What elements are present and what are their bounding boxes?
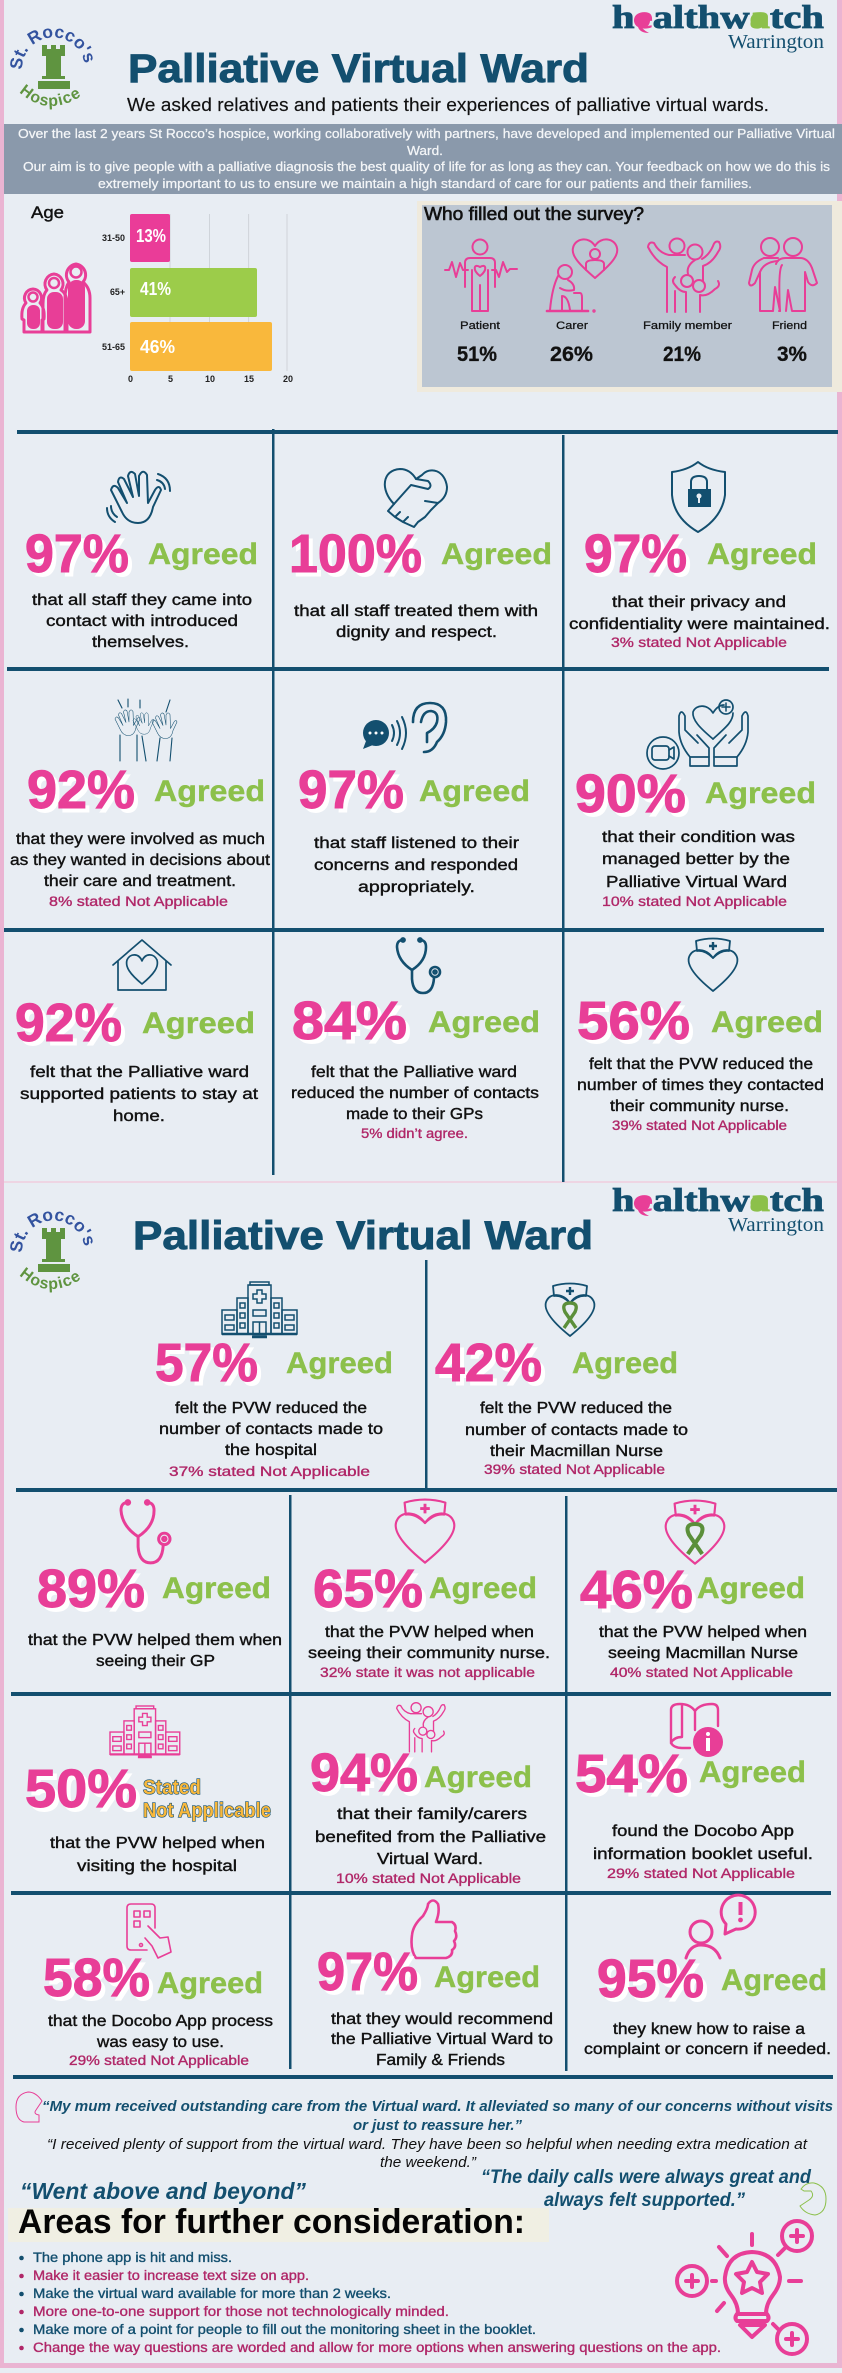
icon: green quote mark xyxy=(800,2183,826,2215)
axis labels: 0 xyxy=(128,374,133,384)
description: made to their GPs xyxy=(346,1106,483,1123)
panel: dignity and respect xyxy=(289,469,552,641)
icon: family of three xyxy=(22,264,90,332)
description: was easy to use. xyxy=(96,2034,224,2051)
logo: St Rocco's Hospice, page 2 xyxy=(6,1204,100,1293)
agreed: Agreed xyxy=(697,1572,805,1605)
stat: 92% xyxy=(15,993,122,1053)
description xyxy=(593,1823,813,1863)
icon: stethoscope xyxy=(397,938,440,993)
description xyxy=(294,603,538,641)
icon: hospital pink xyxy=(110,1706,180,1757)
description: that the PVW helped when xyxy=(325,1624,534,1641)
description: reduced the number of contacts xyxy=(291,1085,539,1102)
icon: tablet with pointer xyxy=(127,1904,171,1958)
list: considerations: Make more of a point for people to fill out the monitoring sheet in the booklet. xyxy=(33,2322,536,2337)
description: that their privacy and xyxy=(612,594,786,611)
not applicable note: 40% stated Not Applicable xyxy=(610,1665,793,1680)
icon: friend xyxy=(749,238,817,311)
not applicable note: 29% stated Not Applicable xyxy=(69,2053,249,2068)
bar: 65+: 65+ xyxy=(110,287,125,297)
intro band: Over the last 2 years St Rocco’s hospice, working collaboratively with partners, have developed and implemented our Palliative Virtual xyxy=(18,126,835,141)
labels: Carer xyxy=(556,320,588,332)
panel: Macmillan nurse contacts xyxy=(435,1284,688,1477)
heading: areas for further consideration: Areas for further consideration: xyxy=(18,2203,525,2241)
agreed: Agreed xyxy=(142,1007,255,1040)
icon: raised hands xyxy=(115,699,177,761)
stat: 57% xyxy=(155,1333,258,1393)
intro band: extremely important to us to ensure we maintain a high standard of care for our patients and their families. xyxy=(98,176,752,191)
panel: staff introduced themselves xyxy=(25,472,258,651)
grid lines, section 2 xyxy=(11,1260,837,2079)
page frame bottom xyxy=(0,2363,842,2368)
panel: raise a complaint xyxy=(584,1895,831,2058)
panel: community nurse contacts xyxy=(577,938,824,1133)
panel: recommend xyxy=(317,1900,553,2069)
panel: condition managed better xyxy=(575,700,816,909)
not applicable note: 39% stated Not Applicable xyxy=(484,1462,665,1477)
title: Palliative Virtual Ward xyxy=(128,47,589,91)
list: considerations: More one-to-one support for those not technologically minded. xyxy=(33,2304,449,2319)
description xyxy=(159,1400,383,1459)
axis labels xyxy=(128,374,293,384)
description: they knew how to raise a xyxy=(613,2021,805,2038)
page divider xyxy=(4,1181,837,1183)
labels: Family member xyxy=(643,320,732,332)
description: themselves. xyxy=(92,634,189,651)
description xyxy=(32,592,252,651)
description xyxy=(308,1624,550,1662)
axis labels: 5 xyxy=(168,374,173,384)
description: appropriately. xyxy=(358,879,475,896)
description: seeing their GP xyxy=(96,1653,215,1670)
bar: 31-50: 31-50 xyxy=(102,233,125,243)
not applicable note: 37% stated Not Applicable xyxy=(169,1464,370,1479)
icon: carer xyxy=(547,239,617,312)
panel: seeing GP xyxy=(28,1501,282,1670)
stat: 50% xyxy=(25,1759,137,1819)
agreed: Agreed xyxy=(699,1756,806,1789)
list: considerations: The phone app is hit and miss. xyxy=(33,2250,232,2265)
panel heading: Who filled out the survey? xyxy=(424,204,644,224)
agreed: Agreed xyxy=(721,1964,827,1997)
agreed: Agreed xyxy=(572,1347,678,1380)
not applicable note: 39% stated Not Applicable xyxy=(612,1118,787,1133)
bar: 51-65: 46% xyxy=(140,337,175,357)
quote: above and beyond: “Went above and beyond” xyxy=(20,2178,306,2204)
quote: plenty of support: the weekend.” xyxy=(380,2155,477,2171)
stat: 97% xyxy=(584,524,687,584)
list: considerations: Make it easier to increase text size on app. xyxy=(33,2268,309,2283)
stat: 97% xyxy=(25,524,129,584)
percentages: 51% xyxy=(457,343,497,366)
panel: hospital contacts xyxy=(155,1282,393,1479)
logo: Healthwatch Warrington, page 2 xyxy=(612,1183,824,1236)
agreed: Agreed xyxy=(157,1967,263,2000)
agreed: Agreed xyxy=(162,1572,271,1605)
panel: information booklet xyxy=(575,1704,813,1881)
icon: pink quote mark xyxy=(16,2092,42,2122)
panel: app easy to use xyxy=(43,1904,273,2068)
icon: nurse heart pink xyxy=(396,1500,454,1563)
description: seeing their community nurse. xyxy=(308,1645,550,1662)
icon: family member xyxy=(648,238,720,312)
icon: patient xyxy=(445,240,517,311)
description: that they were involved as much xyxy=(16,831,265,848)
agreed: Agreed xyxy=(711,1006,823,1039)
panel: privacy xyxy=(569,462,830,650)
icon: speech and ear xyxy=(363,703,446,752)
intro band xyxy=(4,124,842,194)
description: that the PVW helped them when xyxy=(28,1632,282,1649)
icon: thumbs up xyxy=(412,1900,456,1958)
heading: Age: Age xyxy=(31,203,64,222)
panel: family and carers benefited xyxy=(310,1703,546,1886)
bar: 65+: 41% xyxy=(140,279,171,299)
quote: daily calls: “The daily calls were always great and xyxy=(481,2167,811,2188)
description: confidentiality were maintained. xyxy=(569,616,830,633)
description: that staff listened to their xyxy=(314,835,520,852)
stat: 46% xyxy=(580,1560,693,1620)
stat: 92% xyxy=(27,760,135,820)
description: felt that the PVW reduced the xyxy=(589,1056,813,1073)
description: that all staff treated them with xyxy=(294,603,538,620)
stat: 58% xyxy=(43,1948,150,2008)
icon: family pink xyxy=(397,1703,445,1752)
not applicable note: 3% stated Not Applicable xyxy=(611,635,787,650)
description: the Palliative Virtual Ward to xyxy=(331,2031,553,2048)
not applicable note: 29% stated Not Applicable xyxy=(607,1866,795,1881)
description: that the PVW helped when xyxy=(599,1624,807,1641)
icon: caring hands with heart and video call xyxy=(647,700,748,769)
stat: 94% xyxy=(310,1743,418,1803)
description xyxy=(577,1056,824,1115)
description xyxy=(569,594,830,633)
description xyxy=(599,1624,807,1662)
description: that the Docobo App process xyxy=(48,2013,273,2030)
description: felt the PVW reduced the xyxy=(480,1400,672,1417)
percentages xyxy=(457,343,807,366)
percentages: 26% xyxy=(550,343,593,366)
description xyxy=(48,2013,273,2051)
labels: Patient xyxy=(460,320,500,332)
description: their care and treatment. xyxy=(44,873,236,890)
agreed: Agreed xyxy=(419,775,530,808)
description: contact with introduced xyxy=(46,613,238,630)
stat: 90% xyxy=(575,764,686,824)
description xyxy=(315,1806,546,1868)
description: that all staff they came into xyxy=(32,592,252,609)
icon: nurse heart with ribbon pink xyxy=(666,1501,724,1564)
description: that their family/carers xyxy=(337,1806,527,1823)
icon: handshake heart xyxy=(385,469,447,527)
quote: outstanding care: or just to reassure her.” xyxy=(353,2117,522,2134)
description: their Macmillan Nurse xyxy=(490,1443,663,1460)
panel: visiting hospital xyxy=(25,1706,271,1875)
agreed: Agreed xyxy=(428,1006,540,1039)
description: visiting the hospital xyxy=(77,1858,237,1875)
description: concerns and responded xyxy=(314,857,518,874)
stat: 84% xyxy=(292,991,407,1051)
stat: 100% xyxy=(289,524,422,584)
bar: 51-65: 51-65 xyxy=(102,342,125,352)
page frame left xyxy=(0,0,4,2368)
bar: 31-50 xyxy=(102,214,170,262)
percentages: 3% xyxy=(777,343,807,366)
stated not applicable badge: Not Applicable xyxy=(143,1800,271,1822)
description xyxy=(50,1835,265,1875)
description: supported patients to stay at xyxy=(20,1086,259,1103)
axis labels: 10 xyxy=(205,374,215,384)
axis labels: 15 xyxy=(244,374,254,384)
icon: hospital xyxy=(222,1282,297,1337)
panel: who filled out the survey xyxy=(417,201,842,392)
quote: plenty of support: “I received plenty of support from the virtual ward. They have been so helpful when needing extra medication at xyxy=(47,2137,808,2153)
description xyxy=(465,1400,688,1460)
stat: 42% xyxy=(435,1333,542,1393)
logo: Healthwatch Warrington xyxy=(612,0,824,53)
description: seeing Macmillan Nurse xyxy=(608,1645,798,1662)
description: felt that the Palliative ward xyxy=(311,1064,517,1081)
not applicable note: 5% didn’t agree. xyxy=(361,1126,468,1141)
description: that their condition was xyxy=(602,829,795,846)
quote: outstanding care: “My mum received outstanding care from the Virtual ward. It alleviated so many of our concerns without visits xyxy=(42,2098,833,2115)
description xyxy=(314,835,520,896)
description: the hospital xyxy=(225,1442,317,1459)
bar chart: age xyxy=(102,214,293,384)
list: considerations xyxy=(19,2250,721,2355)
stat: 97% xyxy=(298,760,404,820)
icon: book with info xyxy=(671,1704,723,1757)
description xyxy=(10,831,271,890)
quote: daily calls xyxy=(481,2167,811,2211)
icon: shield and lock xyxy=(672,462,725,532)
description: number of contacts made to xyxy=(159,1421,383,1438)
intro band: Ward. xyxy=(407,143,443,158)
agreed: Agreed xyxy=(154,775,265,808)
quote: daily calls: always felt supported.” xyxy=(544,2190,745,2211)
icon: house with heart xyxy=(113,940,171,990)
stated not applicable badge xyxy=(143,1777,271,1822)
description: complaint or concern if needed. xyxy=(584,2041,831,2058)
stat: 97% xyxy=(317,1942,418,2002)
icon: lightbulb with plus signs xyxy=(677,2221,812,2354)
description: Family & Friends xyxy=(376,2052,505,2069)
quote: outstanding care xyxy=(42,2098,833,2134)
grid lines, section 1 xyxy=(4,429,838,1182)
bar: 31-50: 13% xyxy=(136,226,166,246)
logo: St Rocco's Hospice xyxy=(6,21,100,110)
description: their community nurse. xyxy=(610,1098,789,1115)
agreed: Agreed xyxy=(424,1761,532,1794)
agreed: Agreed xyxy=(286,1347,393,1380)
agreed: Agreed xyxy=(705,777,816,810)
quote: plenty of support xyxy=(47,2137,808,2171)
icon: nurse heart with ribbon xyxy=(546,1284,594,1336)
not applicable note: 32% state it was not applicable xyxy=(320,1665,535,1680)
description xyxy=(331,2011,553,2069)
description: Virtual Ward. xyxy=(377,1851,483,1868)
icon: stethoscope pink xyxy=(121,1501,170,1563)
description: benefited from the Palliative xyxy=(315,1829,546,1846)
description: dignity and respect. xyxy=(336,624,497,641)
description: managed better by the xyxy=(602,851,790,868)
percentages: 21% xyxy=(663,343,701,366)
list: considerations: Make the virtual ward available for more than 2 weeks. xyxy=(33,2286,391,2301)
agreed: Agreed xyxy=(148,538,258,571)
panel: seeing Macmillan nurse xyxy=(580,1501,807,1680)
stat: 54% xyxy=(575,1744,688,1804)
not applicable note: 10% stated Not Applicable xyxy=(336,1871,521,1886)
description xyxy=(291,1064,539,1123)
axis labels: 20 xyxy=(283,374,293,384)
agreed: Agreed xyxy=(434,1961,540,1994)
intro band: Our aim is to give people with a palliative diagnosis the best quality of life for as long as they can. Your feedback on how we do this is xyxy=(23,159,831,174)
description: felt the PVW reduced the xyxy=(175,1400,367,1417)
description: found the Docobo App xyxy=(612,1823,794,1840)
description xyxy=(28,1632,282,1670)
page frame right xyxy=(837,0,842,2368)
description xyxy=(584,2021,831,2058)
not applicable note: 8% stated Not Applicable xyxy=(49,894,228,909)
stat: 56% xyxy=(577,991,690,1051)
icon: waving hand xyxy=(107,472,170,523)
description: as they wanted in decisions about xyxy=(10,852,271,869)
agreed: Agreed xyxy=(441,538,552,571)
agreed: Agreed xyxy=(429,1572,537,1605)
labels xyxy=(460,320,807,332)
bar: 65+ xyxy=(110,268,257,317)
panel: GP contacts xyxy=(291,938,540,1141)
stat: 65% xyxy=(313,1559,423,1619)
description: felt that the Palliative ward xyxy=(30,1064,249,1081)
not applicable note: 10% stated Not Applicable xyxy=(602,894,787,909)
list: considerations: Change the way questions are worded and allow for more options when answering questions on the app. xyxy=(33,2340,721,2355)
panel: stay at home xyxy=(15,940,259,1125)
description: number of times they contacted xyxy=(577,1077,824,1094)
agreed: Agreed xyxy=(707,538,817,571)
panel: listened to concerns xyxy=(298,703,530,896)
description: information booklet useful. xyxy=(593,1846,813,1863)
subtitle: We asked relatives and patients their experiences of palliative virtual wards. xyxy=(127,95,769,115)
description xyxy=(20,1064,259,1125)
description: home. xyxy=(113,1108,165,1125)
panel: involved in decisions xyxy=(10,699,271,909)
icon: nurse heart xyxy=(689,938,737,991)
stated not applicable badge: Stated xyxy=(143,1777,201,1799)
description: number of contacts made to xyxy=(465,1422,688,1439)
description: that they would recommend xyxy=(331,2011,553,2028)
description: Palliative Virtual Ward xyxy=(606,874,787,891)
labels: Friend xyxy=(772,320,807,332)
icon: person with alert bubble xyxy=(686,1895,755,1958)
panel: seeing community nurse xyxy=(308,1500,550,1680)
description xyxy=(602,829,795,891)
bar: 51-65 xyxy=(102,322,272,371)
stat: 89% xyxy=(37,1559,145,1619)
description: that the PVW helped when xyxy=(50,1835,265,1852)
title, page 2: Palliative Virtual Ward xyxy=(133,1214,593,1258)
stat: 95% xyxy=(597,1949,704,2009)
